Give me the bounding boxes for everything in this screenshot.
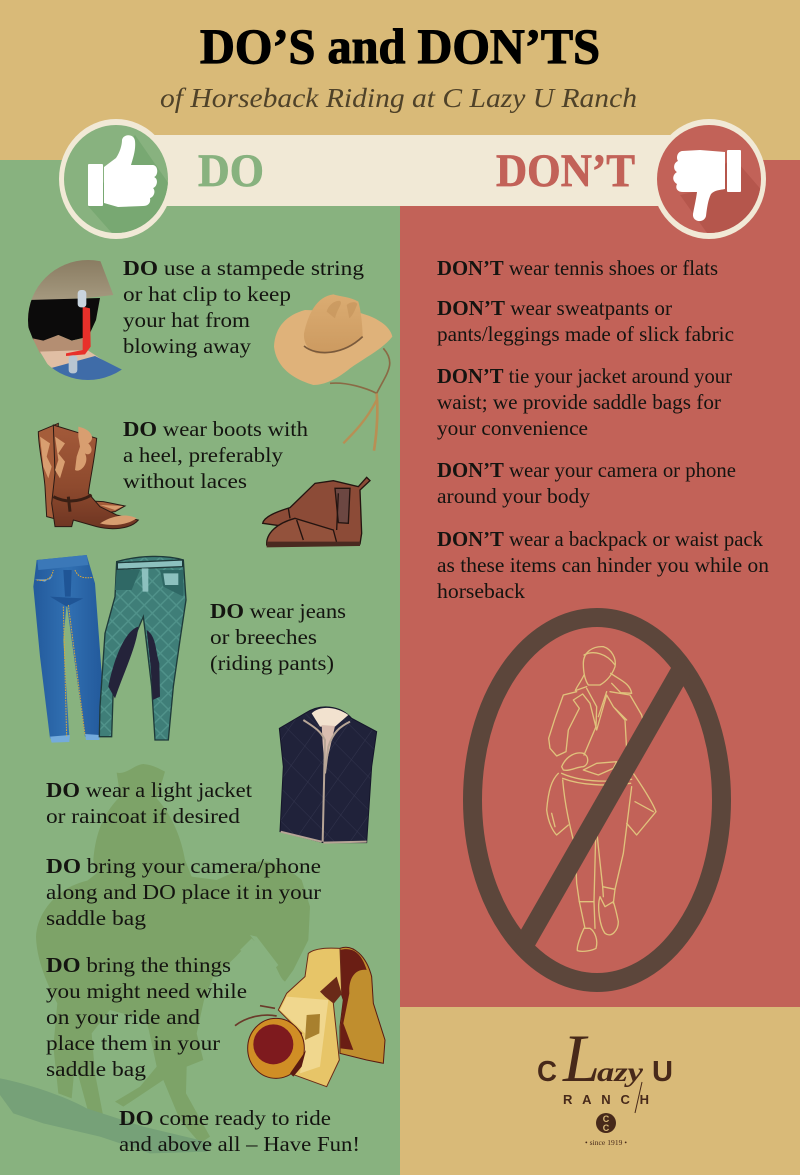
text: backpack [437, 527, 770, 603]
text: tennis shoes: DON’T wear tennis shoes or flats [437, 256, 718, 280]
text: jacket [46, 778, 252, 828]
horse and rider silhouette [0, 764, 310, 1153]
panel: do column background [0, 160, 400, 1175]
text: boots: without laces [123, 469, 247, 493]
logo: c lazy u ranch: azy [597, 1057, 644, 1087]
text: things you might need [46, 953, 247, 1081]
text: stampede string: your hat from [123, 308, 250, 332]
text: things you might need: you might need while [46, 979, 247, 1003]
illustration: jeans [33, 555, 102, 743]
panel: don't column background [400, 160, 800, 1007]
banner [140, 135, 680, 206]
text: camera: saddle bag [46, 906, 147, 930]
logo: c lazy u ranch: U [652, 1056, 673, 1088]
text: jeans [210, 599, 346, 675]
text: jacket around waist [437, 364, 732, 440]
text: have fun: and above all – Have Fun! [119, 1132, 360, 1156]
text: backpack: DON’T wear a backpack or waist pack [437, 527, 763, 551]
photo: hat clip on neck [28, 260, 124, 383]
text: things you might need: place them in your [46, 1031, 220, 1055]
text: jacket: DO wear a light jacket [46, 778, 252, 802]
text: sweatpants: pants/leggings made of slick fabric [437, 322, 734, 346]
illustration: quilted vest [279, 707, 377, 843]
logo: c lazy u ranch: C [603, 1114, 610, 1124]
text: have fun: DO come ready to ride [119, 1106, 331, 1130]
text: jacket around waist: DON’T tie your jacket around your [437, 364, 732, 388]
text: things you might need: saddle bag [46, 1057, 147, 1081]
text: camera: along and DO place it in your [46, 880, 321, 904]
text: sweatpants [437, 296, 734, 346]
text: stampede string [123, 256, 365, 358]
subtitle: of Horseback Riding at C Lazy U Ranch [160, 83, 637, 113]
text: stampede string: blowing away [123, 334, 252, 358]
text: jacket around waist: waist; we provide saddle bags for [437, 390, 721, 414]
text: sweatpants: DON’T wear sweatpants or [437, 296, 672, 320]
text: jeans: (riding pants) [210, 651, 334, 675]
logo: c lazy u ranch [537, 1020, 673, 1147]
text: camera: DO bring your camera/phone [46, 854, 321, 878]
text: camera around body [437, 458, 736, 508]
text: backpack: horseback [437, 579, 526, 603]
text: things you might need: DO bring the things [46, 953, 231, 977]
text: jacket: or raincoat if desired [46, 804, 241, 828]
text: boots [123, 417, 309, 493]
icon: thumbs up [59, 119, 168, 239]
text: backpack: as these items can hinder you while on [437, 553, 770, 577]
text: stampede string: DO use a stampede string [123, 256, 365, 280]
banner label: don't: DON’T [496, 145, 635, 197]
ground shadow [0, 1078, 213, 1153]
text: stampede string: or hat clip to keep [123, 282, 291, 306]
illustration: cowboy hat [274, 294, 392, 451]
illustration: saddle bag [235, 947, 385, 1087]
text: camera around body: around your body [437, 484, 591, 508]
logo: c lazy u ranch: RANCH [563, 1092, 649, 1107]
text: boots: DO wear boots with [123, 417, 309, 441]
text: have fun [119, 1106, 360, 1156]
title: DO’S and DON’TS [200, 18, 600, 74]
text: jeans: DO wear jeans [210, 599, 346, 623]
logo: c lazy u ranch: • since 1919 • [585, 1138, 627, 1147]
text: jacket around waist: your convenience [437, 416, 588, 440]
text: camera around body: DON’T wear your camera or phone [437, 458, 736, 482]
illustration: prohibited rider outline [547, 647, 656, 951]
text: camera [46, 854, 321, 930]
illustration: cowboy boots [38, 423, 138, 529]
illustration: chelsea boots [263, 477, 370, 547]
text: boots: a heel, preferably [123, 443, 284, 467]
banner label: do: DO [198, 145, 264, 197]
text: things you might need: on your ride and [46, 1005, 201, 1029]
logo: c lazy u ranch: C [537, 1056, 557, 1088]
illustration: riding breeches [99, 556, 186, 740]
prohibition sign [472, 618, 722, 982]
icon: thumbs down [652, 119, 770, 240]
logo: c lazy u ranch: L [562, 1020, 600, 1096]
logo: c lazy u ranch: C [603, 1123, 610, 1133]
text: jeans: or breeches [210, 625, 317, 649]
